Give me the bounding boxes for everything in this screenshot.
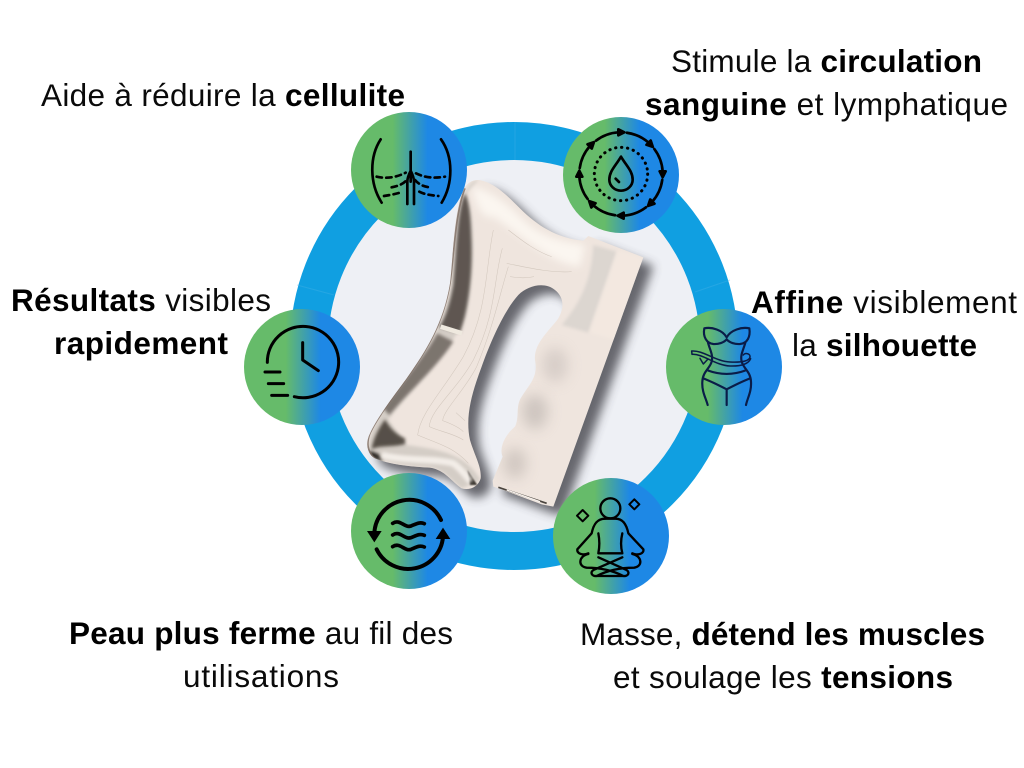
- icon badge: circulation: [563, 117, 679, 233]
- label: muscles: [580, 616, 985, 695]
- end cap: [498, 487, 547, 503]
- icon badge: silhouette: [666, 309, 782, 425]
- grip bumps: [542, 348, 568, 382]
- label: circulation: Stimule la circulation: [671, 43, 982, 79]
- silver edge: [368, 180, 481, 488]
- product: massage device: [350, 170, 660, 515]
- icon badge: meditation: [553, 478, 669, 594]
- label: circulation: [645, 43, 1008, 122]
- stop bar: [441, 327, 462, 333]
- highlight: [472, 187, 585, 267]
- label: results: rapidement: [54, 325, 228, 361]
- outer edge line: [368, 188, 465, 458]
- icon badge: firm skin: [351, 473, 467, 589]
- label: firm skin: [69, 615, 453, 694]
- grip collar: [562, 245, 617, 333]
- label: firm skin: Peau plus ferme au fil des: [69, 615, 453, 651]
- label: silhouette: [751, 284, 1017, 363]
- icon badge: clock: [244, 309, 360, 425]
- label: firm skin: utilisations: [183, 658, 339, 694]
- label: muscles: Masse, détend les muscles: [580, 616, 985, 652]
- label: muscles: et soulage les tensions: [613, 659, 953, 695]
- ring: [297, 122, 730, 551]
- label: cellulite: Aide à réduire la cellulite: [41, 77, 405, 113]
- label: results: [11, 282, 271, 361]
- label: silhouette: la silhouette: [792, 327, 977, 363]
- icon badge: cellulite: [351, 112, 467, 228]
- label: silhouette: Affine visiblement: [751, 284, 1017, 320]
- label: circulation: sanguine et lymphatique: [645, 86, 1008, 122]
- label: results: Résultats visibles: [11, 282, 271, 318]
- grooves: [418, 230, 572, 463]
